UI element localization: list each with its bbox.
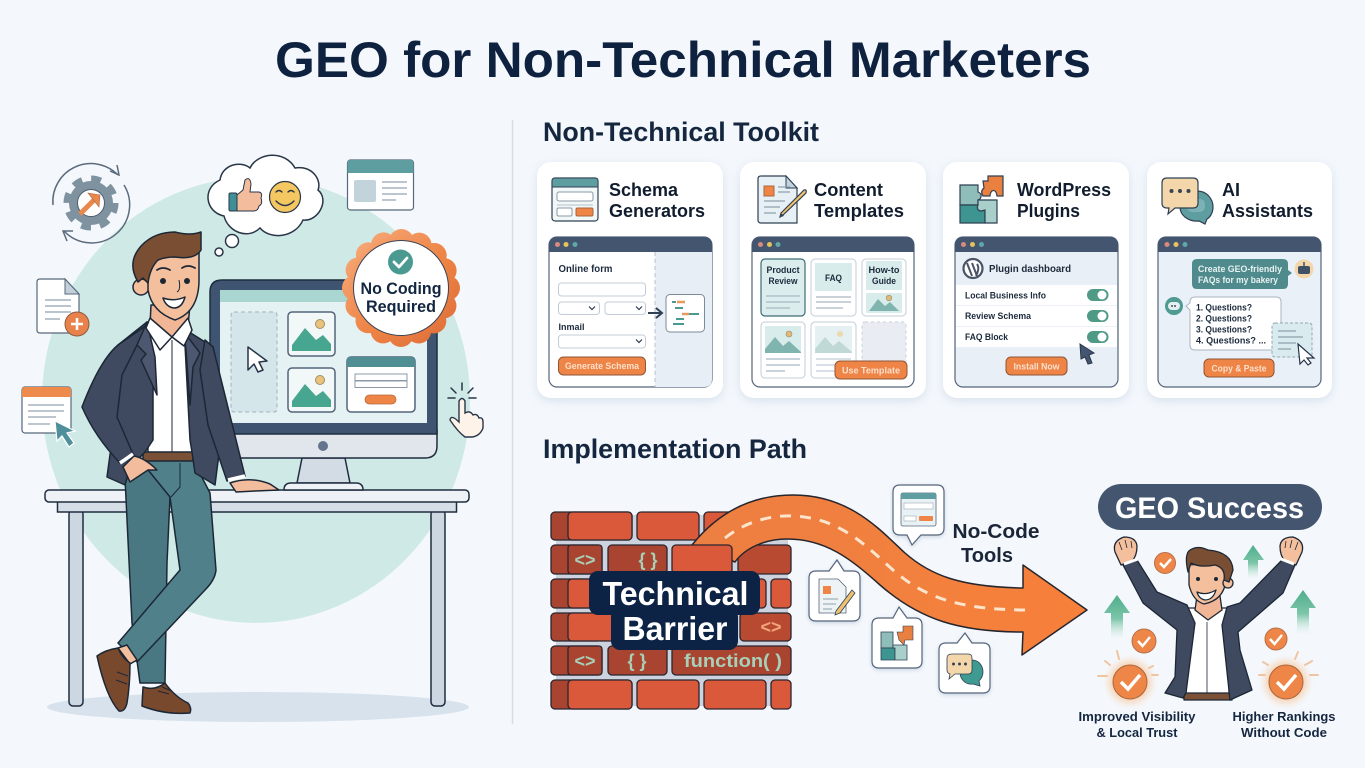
form window: [347, 357, 415, 412]
user message: Create GEO-friendly: [1198, 264, 1283, 275]
desk: [45, 490, 469, 706]
label: technical barrier: Technical: [602, 575, 748, 612]
panel: wordpress plugins: Plugins: [1017, 201, 1080, 221]
cursor: [1080, 344, 1094, 364]
panel: content templates: [740, 162, 926, 398]
tile: puzzle tool: [872, 607, 922, 668]
template: how-to guide: Guide: [872, 276, 896, 286]
app window: plugin dashboard: FAQ Block: [965, 332, 1009, 342]
button: install now: Install Now: [1014, 362, 1060, 372]
icon: gear with cycle arrows: [53, 164, 130, 243]
heading pill: [1098, 484, 1322, 530]
caption: higher rankings: Without Code: [1241, 725, 1327, 740]
arrow: road over the wall: [692, 495, 1087, 655]
label: no-code tools: [952, 521, 1040, 567]
app window: online form: Generate Schema: [565, 361, 640, 371]
neck: [150, 305, 190, 338]
foreground bricks and code symbols: { }: [638, 550, 658, 570]
app window: template gallery: [752, 237, 914, 387]
belt: [1184, 690, 1232, 700]
row four: [551, 613, 791, 641]
background circle: [42, 177, 470, 623]
template: product review: [761, 259, 805, 316]
row five: <>: [574, 651, 596, 671]
icon: pointing hand: [448, 383, 483, 437]
button: use template: [835, 361, 907, 379]
icon: browser window top right: [348, 160, 414, 210]
assistant answer: 3. Questions?: [1196, 324, 1252, 336]
panel: schema generators: Schema: [609, 180, 679, 200]
heading: non-technical toolkit: Non-Technical Toolkit: [543, 117, 819, 147]
head: [1186, 548, 1233, 620]
caption: higher rankings: Higher Rankings: [1232, 709, 1336, 724]
title: GEO for Non-Technical Marketers: [275, 32, 1091, 88]
panel: schema generators: [537, 162, 723, 398]
monitor: [210, 280, 437, 490]
icon: puzzle: [960, 176, 1003, 223]
image tile one: [288, 312, 335, 356]
user message: [1192, 259, 1292, 289]
right sleeve: [200, 340, 245, 481]
app window: online form: Online form: [558, 264, 613, 275]
row one: [551, 512, 744, 540]
brick wall: [551, 512, 791, 709]
cursor: [248, 347, 267, 372]
icon: browser window with cursor: [22, 387, 75, 447]
app window: plugin dashboard: Local Business Info: [965, 290, 1046, 300]
foreground bricks and code symbols: [574, 545, 732, 574]
button: use template: Use Template: [842, 366, 900, 376]
foreground bricks and code symbols: <>: [574, 550, 596, 570]
badge: no coding required: [349, 236, 453, 340]
trousers: [118, 460, 216, 683]
icon: thought bubble with thumbs up and smile: [208, 155, 323, 256]
heading: implementation path: Implementation Path: [543, 434, 807, 464]
icon: document with plus: [37, 279, 89, 336]
tile: form tool: [893, 485, 944, 545]
badge: no coding required: No Coding: [360, 280, 442, 298]
caption: improved visibility: & Local Trust: [1096, 725, 1178, 740]
panel: wordpress plugins: [943, 162, 1129, 398]
panel: content templates: Content: [814, 180, 883, 200]
panel: wordpress plugins: WordPress: [1017, 180, 1111, 200]
panel: marketer at desk illustration: [22, 155, 483, 722]
right lapel: [184, 332, 200, 405]
panel: content templates: Templates: [814, 201, 904, 221]
panel: ai assistants: Assistants: [1222, 201, 1313, 221]
collar: [146, 318, 192, 350]
hands: [123, 456, 279, 492]
app window: online form: Inmail: [558, 322, 584, 333]
label: no-code tools: Tools: [961, 545, 1013, 567]
caption: higher rankings: [1232, 709, 1336, 740]
user message: FAQs for my bakery: [1198, 275, 1279, 286]
icon: form: [552, 178, 598, 221]
image tile two: [288, 368, 335, 412]
app window: online form: [549, 237, 712, 387]
template: how-to guide: How-to: [868, 265, 900, 275]
assistant answer: 1. Questions?: [1196, 302, 1252, 314]
app window: plugin dashboard: Plugin dashboard: [989, 264, 1071, 275]
panel: ai assistants: [1147, 162, 1332, 398]
row five: [551, 646, 791, 675]
assistant answer: 4. Questions? ...: [1196, 336, 1266, 346]
marketer figure: [82, 232, 279, 713]
tile: chat tool: [939, 633, 990, 693]
button: copy and paste: Copy & Paste: [1212, 364, 1266, 374]
label: technical barrier: Barrier: [622, 610, 728, 647]
button: install now: [1006, 357, 1067, 375]
head: [133, 232, 201, 320]
icon: chat bubbles: [1162, 178, 1213, 224]
copied note with cursor: [1272, 323, 1314, 365]
assistant answer: [1186, 297, 1281, 350]
panel: geo success: [1078, 484, 1336, 740]
left sleeve: [82, 325, 147, 463]
template: faq: [811, 259, 856, 316]
jacket: [82, 322, 245, 485]
assistant answer: 2. Questions?: [1196, 314, 1252, 324]
shirt: [1184, 608, 1230, 693]
app window: plugin dashboard: [955, 237, 1118, 387]
cuffs: [120, 454, 133, 463]
label: technical barrier: [589, 571, 760, 650]
template: faded article: [811, 322, 856, 378]
growth arrows: [1104, 545, 1316, 638]
badge: no coding required: Required: [366, 298, 436, 316]
icon: wordpress logo: [964, 259, 982, 278]
success figure: [1114, 537, 1303, 700]
panel: schema generators: Generators: [609, 201, 705, 221]
icon: document with pencil: [758, 176, 806, 223]
row five: function( ): [684, 651, 782, 671]
panel: ai assistants: AI: [1222, 180, 1240, 200]
caption: improved visibility: Improved Visibility: [1078, 709, 1196, 724]
button: copy and paste: [1204, 359, 1274, 377]
left lapel: [137, 322, 157, 395]
shoes: [97, 645, 191, 713]
template: image article: [761, 322, 805, 378]
drop zone: [231, 312, 277, 412]
label: no-code tools: No-Code: [952, 521, 1040, 543]
caption: improved visibility: [1078, 709, 1196, 740]
icon: assistant avatar: [1165, 297, 1183, 315]
template: how-to guide: [862, 259, 906, 316]
row five: { }: [627, 651, 647, 671]
app window: ai chat: [1158, 237, 1321, 387]
jacket right front: [185, 330, 222, 485]
template: blank slot: [862, 322, 906, 372]
jacket left front: [107, 322, 153, 485]
check badges: [1098, 552, 1318, 703]
toggles: [1087, 289, 1108, 343]
shirt: [147, 322, 193, 453]
row two: [551, 545, 791, 574]
row six: [551, 680, 791, 709]
tile: template tool: [809, 560, 860, 621]
app window: plugin dashboard: Review Schema: [965, 311, 1032, 321]
template: faq: FAQ: [825, 273, 842, 283]
belt: [143, 452, 193, 461]
template: product review: Product: [766, 265, 800, 275]
heading pill: GEO Success: [1115, 492, 1304, 525]
icon: bot avatar: [1294, 260, 1314, 278]
floor shadow: [47, 692, 469, 722]
template: product review: Review: [768, 276, 798, 286]
row three: [551, 579, 791, 608]
jacket and arms: [1123, 560, 1295, 700]
row four: <>: [760, 617, 782, 637]
fists: [1114, 537, 1303, 565]
